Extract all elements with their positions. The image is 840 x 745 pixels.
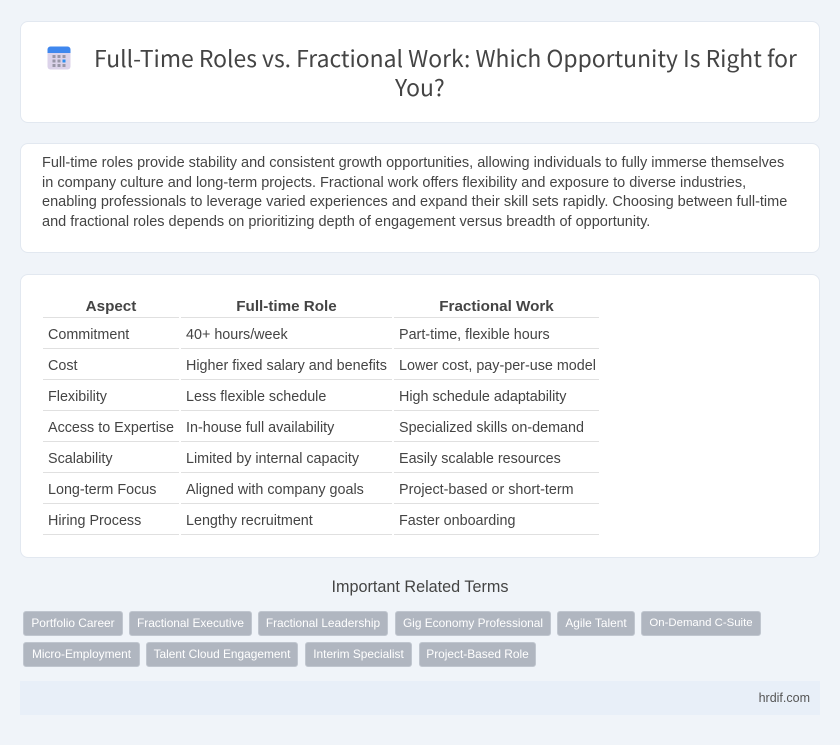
- footer source: hrdif.com: [759, 691, 810, 705]
- comparison table: Less flexible schedule: [186, 389, 326, 405]
- comparison table: 40+ hours/week: [186, 327, 288, 343]
- related term tags: [23, 611, 761, 667]
- comparison table: Specialized skills on-demand: [399, 420, 584, 436]
- panel: comparison table: [20, 274, 820, 558]
- related term tags: Gig Economy Professional: [403, 616, 543, 630]
- comparison table: Easily scalable resources: [399, 451, 561, 467]
- comparison table: [43, 298, 599, 535]
- intro text: in company culture and long-term projects. Fractional work offers flexibility and exposure to diverse industries,: [42, 174, 746, 190]
- related term tags: Fractional Executive: [137, 616, 244, 630]
- related term tags: Talent Cloud Engagement: [154, 647, 290, 661]
- comparison table: Full-time Role: [236, 298, 337, 315]
- comparison table: Part-time, flexible hours: [399, 327, 550, 343]
- comparison table: Limited by internal capacity: [186, 451, 359, 467]
- related term tags: Micro-Employment: [32, 647, 131, 661]
- comparison table: Aspect: [86, 298, 136, 315]
- comparison table: Lower cost, pay-per-use model: [399, 358, 596, 374]
- comparison table: Cost: [48, 358, 78, 374]
- comparison table: Hiring Process: [48, 513, 141, 529]
- comparison table: Scalability: [48, 451, 113, 467]
- header panel: [20, 21, 820, 123]
- title: Full-Time Roles vs. Fractional Work: Which Opportunity Is Right for: [94, 40, 797, 74]
- title: [94, 40, 797, 103]
- icon: calendar: [48, 46, 70, 70]
- comparison table: Access to Expertise: [48, 420, 174, 436]
- related term tags: Project-Based Role: [426, 647, 529, 661]
- intro text: [42, 155, 787, 230]
- comparison table: Flexibility: [48, 389, 107, 405]
- related term tags: On-Demand C-Suite: [649, 617, 753, 629]
- intro text: and fractional roles depends on prioritizing depth of engagement versus breadth of opportunity.: [42, 214, 650, 230]
- comparison table: Commitment: [48, 327, 129, 343]
- panel: intro: [20, 143, 820, 253]
- intro text: Full-time roles provide stability and consistent growth opportunities, allowing individuals to fully immerse themselves: [42, 155, 784, 171]
- comparison table: In-house full availability: [186, 420, 334, 436]
- heading: related terms: Important Related Terms: [332, 578, 508, 596]
- comparison table: Aligned with company goals: [186, 482, 364, 498]
- comparison table: Fractional Work: [439, 298, 554, 315]
- comparison table: Higher fixed salary and benefits: [186, 358, 387, 374]
- related term tags: Portfolio Career: [31, 616, 115, 630]
- comparison table: High schedule adaptability: [399, 389, 566, 405]
- related term tags: Interim Specialist: [313, 647, 404, 661]
- related term tags: Agile Talent: [565, 616, 627, 630]
- title: You?: [395, 69, 445, 103]
- footer bar: [20, 681, 820, 715]
- related term tags: Fractional Leadership: [266, 616, 380, 630]
- comparison table: Lengthy recruitment: [186, 513, 313, 529]
- intro text: enabling professionals to leverage varied experiences and expand their skill sets rapidly. Choosing between full-time: [42, 194, 787, 210]
- comparison table: Long-term Focus: [48, 482, 156, 498]
- comparison table: Faster onboarding: [399, 513, 515, 529]
- comparison table: Project-based or short-term: [399, 482, 574, 498]
